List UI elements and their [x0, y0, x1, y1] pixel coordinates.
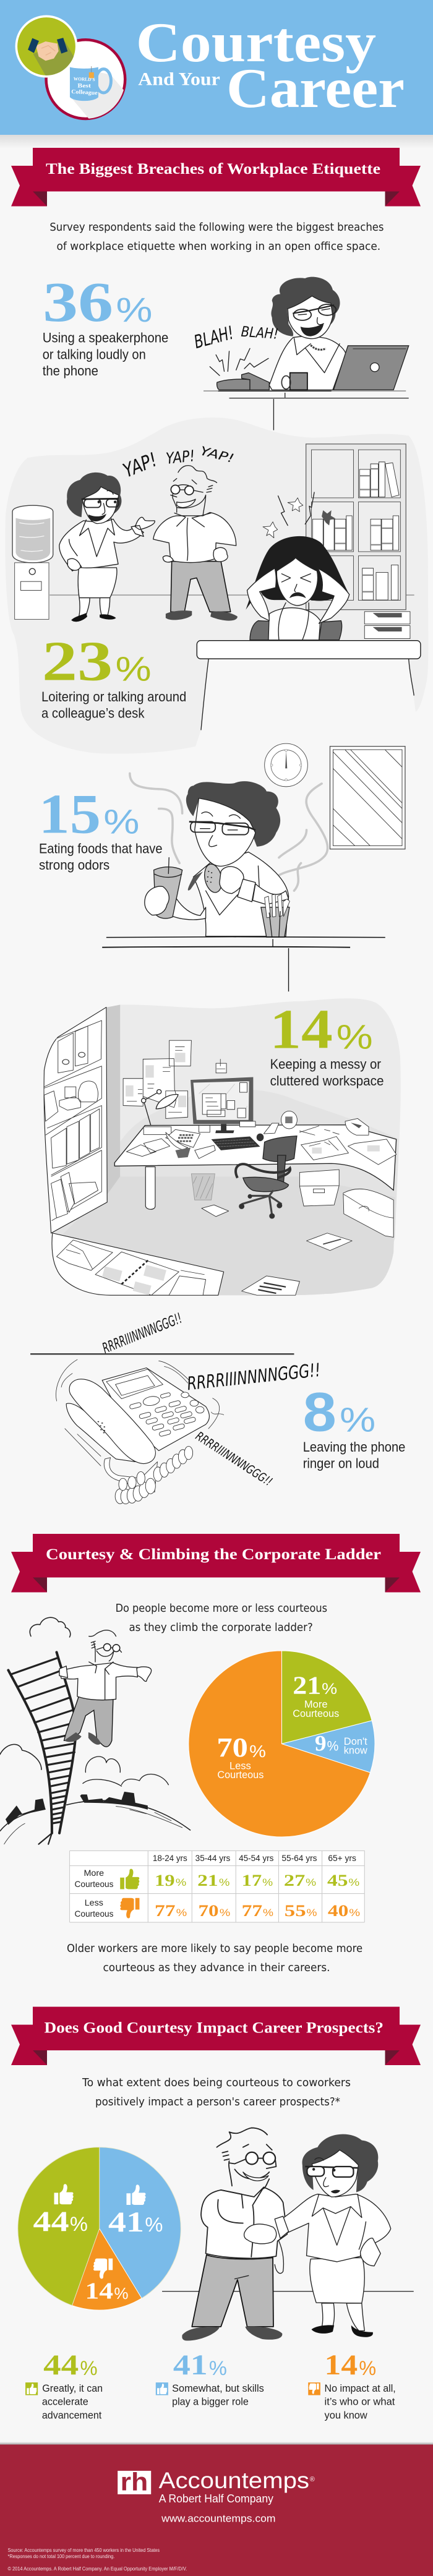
row: less courteous: 40	[328, 1901, 348, 1920]
result: 14 percent: it’s who or what	[325, 2396, 395, 2408]
row: more courteous: 27	[284, 1871, 305, 1889]
background blob	[5, 417, 429, 754]
pie label: 9 percent	[315, 1731, 367, 1757]
conclusion text	[67, 1942, 362, 1974]
result: 44 percent: advancement	[42, 2410, 102, 2421]
row: less courteous: 77	[242, 1901, 262, 1920]
window	[330, 747, 405, 849]
logo: Accountemps	[159, 2467, 309, 2493]
section 3 question: To what extent does being courteous to coworkers	[82, 2076, 351, 2089]
question text: as they climb the corporate ladder?	[129, 1621, 313, 1634]
section 1 scene 3	[44, 773, 401, 1295]
section 2 banner	[11, 1534, 421, 1592]
stat: 36 percent: the phone	[43, 363, 98, 379]
result: 41 percent: Somewhat, but skills	[172, 2382, 264, 2394]
pie label: 44 percent: 44	[33, 2206, 69, 2238]
illustration: annoyed woman at desk	[197, 492, 421, 730]
pie label: 70 percent: %	[249, 1742, 266, 1761]
pie label: 41 percent: %	[145, 2214, 163, 2236]
stat: 14 percent	[270, 998, 384, 1089]
row: less courteous: 70	[199, 1901, 219, 1920]
stat: 8 percent: Leaving the phone	[303, 1439, 405, 1455]
conclusion text: courteous as they advance in their careers.	[103, 1961, 330, 1974]
ringing text	[100, 1310, 322, 1489]
illustration: talking man	[153, 466, 238, 621]
illustration: man on ladder with clouds and city	[0, 1617, 191, 1844]
table header: 65+ yrs	[328, 1854, 356, 1864]
row: less courteous: %	[176, 1907, 187, 1919]
stat: 8 percent: 8	[303, 1380, 337, 1442]
result: 44 percent: 44	[43, 2349, 79, 2381]
desk line	[30, 1353, 294, 1356]
result: 41 percent: 41	[173, 2349, 208, 2381]
question text: Do people become more or less courteous	[116, 1602, 327, 1615]
ringing text: RRRRIIINNNNGGG!!	[186, 1359, 322, 1394]
section 2 scaled content	[0, 1602, 327, 1844]
logo: ®	[310, 2476, 315, 2483]
table header: 35-44 yrs	[195, 1854, 230, 1864]
pie label: 70 percent	[216, 1732, 266, 1781]
section 3 banner: Does Good Courtesy Impact Career Prospects?	[45, 2020, 384, 2037]
age breakdown table	[70, 1851, 364, 1922]
row: less courteous	[75, 1898, 360, 1920]
logo: rh	[121, 2468, 148, 2496]
row: less courteous: %	[307, 1907, 317, 1919]
icon: coffee mug badge: Colleague	[71, 89, 98, 96]
pie label: 21 percent: More	[304, 1699, 328, 1710]
table header: 18-24 yrs	[153, 1854, 187, 1864]
title: Career	[226, 56, 405, 119]
pie chart: career prospects	[18, 2147, 181, 2310]
icon: coffee mug badge: WORLD'S	[74, 76, 95, 82]
stat: 14 percent: cluttered workspace	[270, 1073, 384, 1089]
ringing text: RRRRIIINNNNGGG!!	[100, 1310, 184, 1357]
illustration: ringing desk phone	[56, 1359, 224, 1504]
stat: 15 percent: Eating foods that have	[39, 841, 163, 856]
section 3 banner	[11, 2007, 421, 2065]
pie label: 70 percent: 70	[216, 1732, 248, 1763]
result: 41 percent	[156, 2349, 264, 2408]
logo: A Robert Half Company	[159, 2492, 274, 2505]
table header	[153, 1854, 356, 1864]
section 1 scene 4	[30, 1310, 405, 1504]
illustration: woman eating at desk	[102, 781, 385, 991]
title	[136, 11, 405, 119]
stat: 14 percent: Keeping a messy or	[270, 1056, 381, 1072]
stat: 15 percent: strong odors	[39, 857, 109, 873]
pie label: 70 percent: Courteous	[217, 1769, 264, 1781]
row: less courteous: Less	[85, 1898, 103, 1908]
section 2 banner: Courtesy & Climbing the Corporate Ladder	[46, 1546, 381, 1563]
intro text: of workplace etiquette when working in an open office space.	[57, 240, 380, 253]
stat: 8 percent: %	[340, 1400, 375, 1439]
row: more courteous: 19	[155, 1871, 175, 1889]
section 1 scene 2	[5, 417, 429, 873]
stat: 15 percent: 15	[39, 782, 101, 845]
pie label: 70 percent: Less	[229, 1760, 251, 1771]
source notes: Source: Accountemps survey of more than 450 workers in the United States	[8, 2548, 160, 2553]
pie label: 9 percent: know	[344, 1745, 367, 1757]
speech text: yap yap yap	[120, 443, 236, 482]
table header: 55-64 yrs	[281, 1854, 317, 1864]
speech text: yap yap yap: YAP!	[120, 448, 160, 482]
pie label: 14 percent	[85, 2259, 129, 2304]
pie chart: courtesy climbing the ladder	[189, 1651, 375, 1837]
question text	[116, 1602, 327, 1634]
title: Courtesy	[136, 11, 376, 74]
odor lines	[130, 773, 328, 891]
row: more courteous: Courteous	[75, 1880, 113, 1889]
result: 44 percent: %	[80, 2357, 98, 2379]
bookcase	[306, 444, 406, 610]
row: more courteous: %	[176, 1876, 186, 1888]
source notes: © 2014 Accountemps. A Robert Half Company. An Equal Opportunity Employer M/F/D/V.	[8, 2566, 187, 2572]
row: more courteous: %	[306, 1876, 316, 1888]
pie label: 21 percent: %	[322, 1680, 337, 1698]
logo	[118, 2467, 315, 2505]
section 3 question	[82, 2076, 351, 2108]
pie label: 44 percent: %	[70, 2213, 88, 2235]
speech text: yap yap yap: YAP!	[199, 443, 236, 466]
pie label: 21 percent: Courteous	[293, 1708, 339, 1719]
speech text: yap yap yap: YAP!	[165, 447, 195, 468]
stat: 36 percent: 36	[43, 270, 113, 333]
stat: 36 percent: Using a speakerphone	[43, 330, 168, 346]
pie label: 9 percent: Don't	[344, 1736, 367, 1747]
pie label: 9 percent: %	[327, 1738, 338, 1753]
footer	[0, 2442, 433, 2576]
pie label: 14 percent: %	[114, 2285, 129, 2303]
wall clock	[265, 743, 307, 787]
section 1 banner: The Biggest Breaches of Workplace Etiquette	[46, 161, 380, 178]
pie label: 41 percent	[108, 2184, 163, 2238]
row: more courteous: 21	[197, 1871, 218, 1889]
icon: coffee mug badge: Best	[77, 83, 92, 90]
water cooler	[12, 505, 53, 619]
ringing text: RRRRIIINNNNGGG!!	[193, 1429, 275, 1489]
row: less courteous: 55	[285, 1901, 306, 1920]
stat: 36 percent: or talking loudly on	[43, 346, 146, 362]
pie label: 44 percent	[33, 2184, 88, 2238]
pie label: 21 percent: 21	[293, 1671, 321, 1699]
conclusion text: Older workers are more likely to say people become more	[67, 1942, 362, 1955]
pie label: 14 percent: 14	[85, 2278, 113, 2304]
illustration: woman on speakerphone at desk: BLAH!	[192, 322, 236, 353]
stat: 36 percent	[43, 270, 168, 379]
stat: 23 percent: 23	[42, 630, 113, 693]
illustration: handshake man	[182, 2128, 287, 2340]
row: less courteous: %	[220, 1907, 230, 1919]
stat: 14 percent: 14	[270, 998, 333, 1061]
illustration: woman on speakerphone at desk: BLAH!	[241, 323, 279, 343]
floor line	[49, 594, 414, 596]
stat: 23 percent: %	[116, 649, 152, 688]
row: more courteous: %	[348, 1876, 359, 1888]
result: 14 percent	[308, 2349, 396, 2421]
row: more courteous: 17	[242, 1871, 262, 1889]
title: And Your	[138, 70, 220, 90]
result: 14 percent: %	[359, 2357, 376, 2379]
result: 14 percent: you know	[325, 2410, 367, 2421]
stat: 8 percent: ringer on loud	[303, 1456, 379, 1471]
section 1 scaled content	[43, 221, 409, 430]
pie label: 21 percent	[293, 1671, 339, 1719]
illustration: talking woman	[59, 473, 155, 622]
row: more courteous: 45	[327, 1871, 348, 1889]
intro text	[49, 221, 384, 253]
row: more courteous: %	[262, 1876, 273, 1888]
section 1 banner	[11, 148, 421, 207]
stat: 23 percent: a colleague’s desk	[41, 706, 145, 721]
row: less courteous: %	[349, 1907, 360, 1919]
result: 41 percent: play a bigger role	[172, 2396, 249, 2408]
result: 41 percent: %	[209, 2357, 227, 2379]
illustration: handshake woman	[275, 2134, 391, 2337]
result: 44 percent: Greatly, it can	[42, 2382, 103, 2394]
stat: 23 percent	[41, 630, 186, 721]
table header: 45-54 yrs	[239, 1854, 273, 1864]
illustration: cluttered office	[44, 998, 401, 1295]
result: 44 percent	[25, 2349, 103, 2421]
pie label: 41 percent: 41	[108, 2206, 144, 2238]
stat: 15 percent	[39, 782, 163, 873]
stat: 36 percent: %	[116, 290, 152, 329]
row: more courteous	[75, 1868, 359, 1889]
stat: 23 percent: Loitering or talking around	[41, 689, 186, 704]
result: 44 percent: accelerate	[42, 2396, 88, 2408]
source notes: *Responses do not total 100 percent due to rounding.	[8, 2554, 114, 2559]
stat: 14 percent: %	[337, 1017, 373, 1056]
source notes	[8, 2548, 187, 2572]
handshake hands	[244, 2224, 277, 2244]
row: more courteous: More	[84, 1868, 104, 1878]
row: less courteous: 77	[155, 1901, 175, 1920]
website: www.accountemps.com	[161, 2513, 276, 2525]
stat: 8 percent	[303, 1380, 405, 1471]
section 3 scaled content	[18, 2128, 414, 2421]
row: less courteous: %	[263, 1907, 273, 1919]
row: more courteous: %	[219, 1876, 229, 1888]
icon: coffee mug badge	[45, 38, 130, 121]
icon: handshake badge	[15, 15, 77, 78]
intro text: Survey respondents said the following were the biggest breaches	[49, 221, 384, 234]
illustration: woman on speakerphone at desk	[192, 277, 409, 430]
section 3 question: positively impact a person's career prospects?*	[95, 2095, 340, 2108]
stat: 15 percent: %	[103, 802, 139, 841]
result: 14 percent: 14	[325, 2349, 358, 2381]
result: 14 percent: No impact at all,	[325, 2382, 396, 2394]
floor line	[162, 2290, 414, 2292]
pie label: 9 percent: 9	[315, 1731, 327, 1755]
header band	[0, 0, 433, 148]
row: less courteous: Courteous	[75, 1909, 113, 1919]
